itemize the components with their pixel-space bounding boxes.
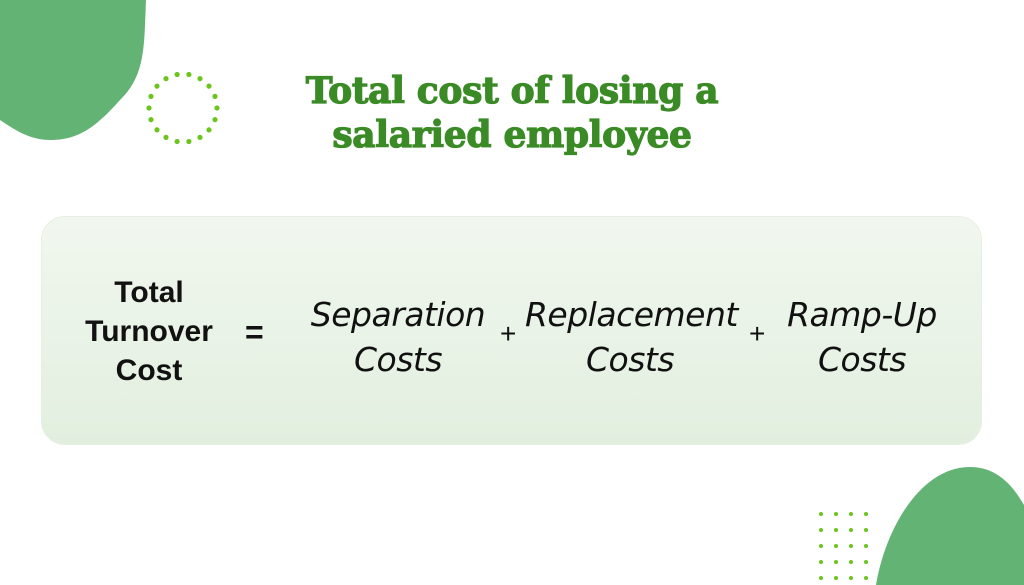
- term: separation costs: Separation: [311, 295, 485, 334]
- plus sign 2: +: [749, 318, 765, 349]
- title: salaried employee: [332, 114, 692, 156]
- text: total turnover cost: Turnover: [85, 315, 213, 348]
- text: total turnover cost: [85, 276, 213, 387]
- term: replacement costs: Replacement: [525, 295, 738, 334]
- text: total turnover cost: Total: [114, 276, 184, 309]
- term: ramp-up costs: Costs: [818, 340, 906, 379]
- term: separation costs: Costs: [354, 340, 442, 379]
- plus sign 1: +: [500, 318, 516, 349]
- term: ramp-up costs: Ramp-Up: [787, 295, 937, 334]
- equals sign: =: [245, 314, 264, 350]
- term: replacement costs: [525, 295, 740, 379]
- term: ramp-up costs: [787, 295, 937, 379]
- title: [306, 70, 718, 156]
- panel: formula: [41, 216, 982, 445]
- text: total turnover cost: Cost: [116, 354, 182, 387]
- title: Total cost of losing a: [306, 70, 718, 112]
- term: separation costs: [311, 295, 485, 379]
- term: replacement costs: Costs: [586, 340, 674, 379]
